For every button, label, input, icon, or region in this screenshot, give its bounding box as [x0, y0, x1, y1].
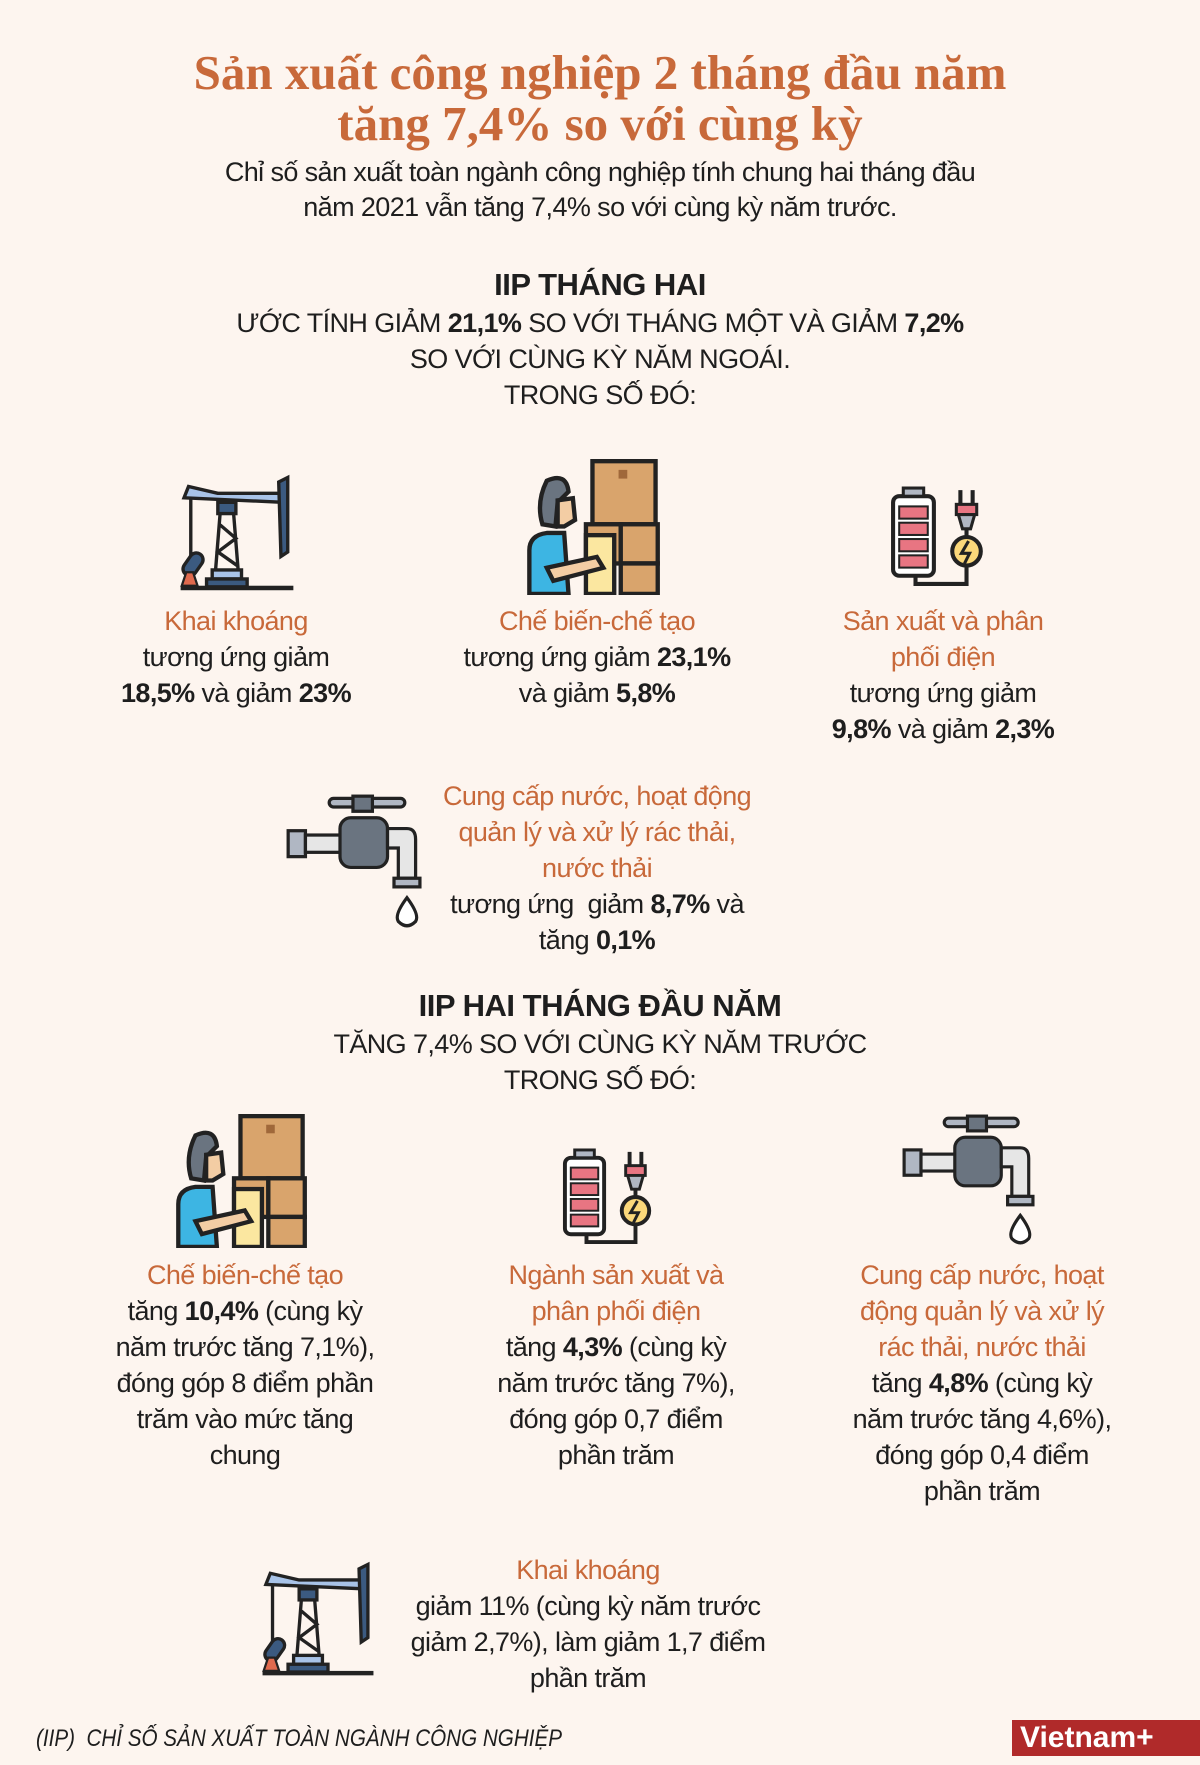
text: điện 2: tăng 4,3% (cùng kỳ — [506, 1332, 726, 1362]
text: điện 2: phân phối điện — [532, 1296, 700, 1326]
title: Sản xuất công nghiệp 2 tháng đầu năm — [194, 45, 1006, 100]
text: nước 2: năm trước tăng 4,6%), — [853, 1404, 1111, 1434]
icon: battery 2 — [562, 1148, 652, 1244]
subtitle: năm 2021 vẫn tăng 7,4% so với cùng kỳ năm trước. — [303, 192, 897, 222]
text: summary 2: TĂNG 7,4% SO VỚI CÙNG KỲ NĂM TRƯỚC — [333, 1029, 867, 1059]
text: IIP tháng hai summary: TRONG SỐ ĐÓ: — [504, 380, 696, 410]
text: điện 2: năm trước tăng 7%), — [497, 1368, 735, 1398]
icon: water tap — [286, 794, 422, 928]
text: chế biến 2: đóng góp 8 điểm phần — [117, 1368, 373, 1398]
text: điện: tương ứng giảm — [850, 678, 1036, 708]
text: điện: phối điện — [891, 642, 995, 672]
icon: oil pump 2 — [262, 1562, 374, 1676]
text: khai khoáng 2: giảm 2,7%), làm giảm 1,7 điểm — [411, 1627, 765, 1657]
text: điện: Sản xuất và phân — [843, 606, 1043, 636]
text: nước: tương ứng giảm 8,7% và — [450, 889, 744, 919]
text: khai khoáng 2: giảm 11% (cùng kỳ năm trước — [416, 1591, 760, 1621]
heading: IIP hai tháng: IIP HAI THÁNG ĐẦU NĂM — [419, 988, 781, 1023]
text: chế biến 2: tăng 10,4% (cùng kỳ — [128, 1296, 362, 1326]
text: khai khoáng: 18,5% và giảm 23% — [121, 678, 351, 708]
title — [194, 45, 1006, 151]
text: khai khoáng 2: phần trăm — [530, 1663, 646, 1693]
text: điện — [832, 606, 1054, 744]
text: điện 2: đóng góp 0,7 điểm — [509, 1404, 723, 1434]
logo: Vietnam+: Vietnam+ — [1020, 1721, 1154, 1754]
text: chế biến 2 — [116, 1260, 374, 1470]
text: nước: Cung cấp nước, hoạt động — [443, 781, 751, 811]
text: nước 2: phần trăm — [924, 1476, 1040, 1506]
text: nước: quản lý và xử lý rác thải, — [458, 817, 736, 847]
text: khai khoáng 2 — [411, 1555, 765, 1693]
text: IIP tháng hai summary: SO VỚI CÙNG KỲ NĂM NGOÁI. — [410, 344, 790, 374]
text: chế biến: và giảm 5,8% — [519, 678, 675, 708]
logo: Vietnam+ — [1012, 1720, 1200, 1756]
text: khai khoáng: tương ứng giảm — [143, 642, 329, 672]
text: nước 2: đóng góp 0,4 điểm — [875, 1440, 1089, 1470]
text: nước 2 — [853, 1260, 1111, 1506]
icon: battery plug — [891, 486, 983, 586]
text: nước — [443, 781, 751, 955]
text: nước: tăng 0,1% — [539, 925, 655, 955]
text: chế biến 2: trăm vào mức tăng — [137, 1404, 353, 1434]
icon: tap 2 — [902, 1114, 1035, 1244]
text: chế biến 2: năm trước tăng 7,1%), — [116, 1332, 374, 1362]
heading: IIP tháng hai: IIP THÁNG HAI — [494, 267, 706, 302]
text: điện 2 — [497, 1260, 735, 1470]
text: điện 2: Ngành sản xuất và — [509, 1260, 723, 1290]
subtitle — [225, 157, 975, 222]
text: nước 2: động quản lý và xử lý — [860, 1296, 1104, 1326]
text: IIP tháng hai summary: ƯỚC TÍNH GIẢM 21,1% SO VỚI THÁNG MỘT VÀ GIẢM 7,2% — [236, 308, 964, 338]
text: IIP tháng hai summary — [236, 308, 964, 410]
text: nước 2: rác thải, nước thải — [878, 1332, 1086, 1362]
footnote: (IIP) CHỈ SỐ SẢN XUẤT TOÀN NGÀNH CÔNG NGHIỆP — [36, 1725, 562, 1752]
text: chế biến: tương ứng giảm 23,1% — [463, 642, 730, 672]
text: khai khoáng: Khai khoáng — [164, 606, 308, 636]
text: nước 2: Cung cấp nước, hoạt — [860, 1260, 1104, 1290]
icon: oil pump — [180, 474, 294, 590]
text: nước: nước thải — [542, 853, 652, 883]
text: khai khoáng 2: Khai khoáng — [516, 1555, 660, 1585]
text: summary 2: TRONG SỐ ĐÓ: — [504, 1065, 696, 1095]
text: điện: 9,8% và giảm 2,3% — [832, 714, 1054, 744]
text: chế biến: Chế biến-chế tạo — [499, 606, 695, 636]
text: khai khoáng — [121, 606, 351, 708]
text: chế biến 2: Chế biến-chế tạo — [147, 1260, 343, 1290]
icon: worker with boxes 2 — [176, 1114, 307, 1248]
icon: worker with boxes — [527, 459, 660, 595]
text: summary 2 — [333, 1029, 867, 1095]
title: tăng 7,4% so với cùng kỳ — [337, 96, 863, 151]
text: nước 2: tăng 4,8% (cùng kỳ — [872, 1368, 1092, 1398]
subtitle: Chỉ số sản xuất toàn ngành công nghiệp tính chung hai tháng đầu — [225, 157, 975, 187]
text: điện 2: phần trăm — [558, 1440, 674, 1470]
text: chế biến — [463, 606, 730, 708]
text: chế biến 2: chung — [210, 1440, 280, 1470]
